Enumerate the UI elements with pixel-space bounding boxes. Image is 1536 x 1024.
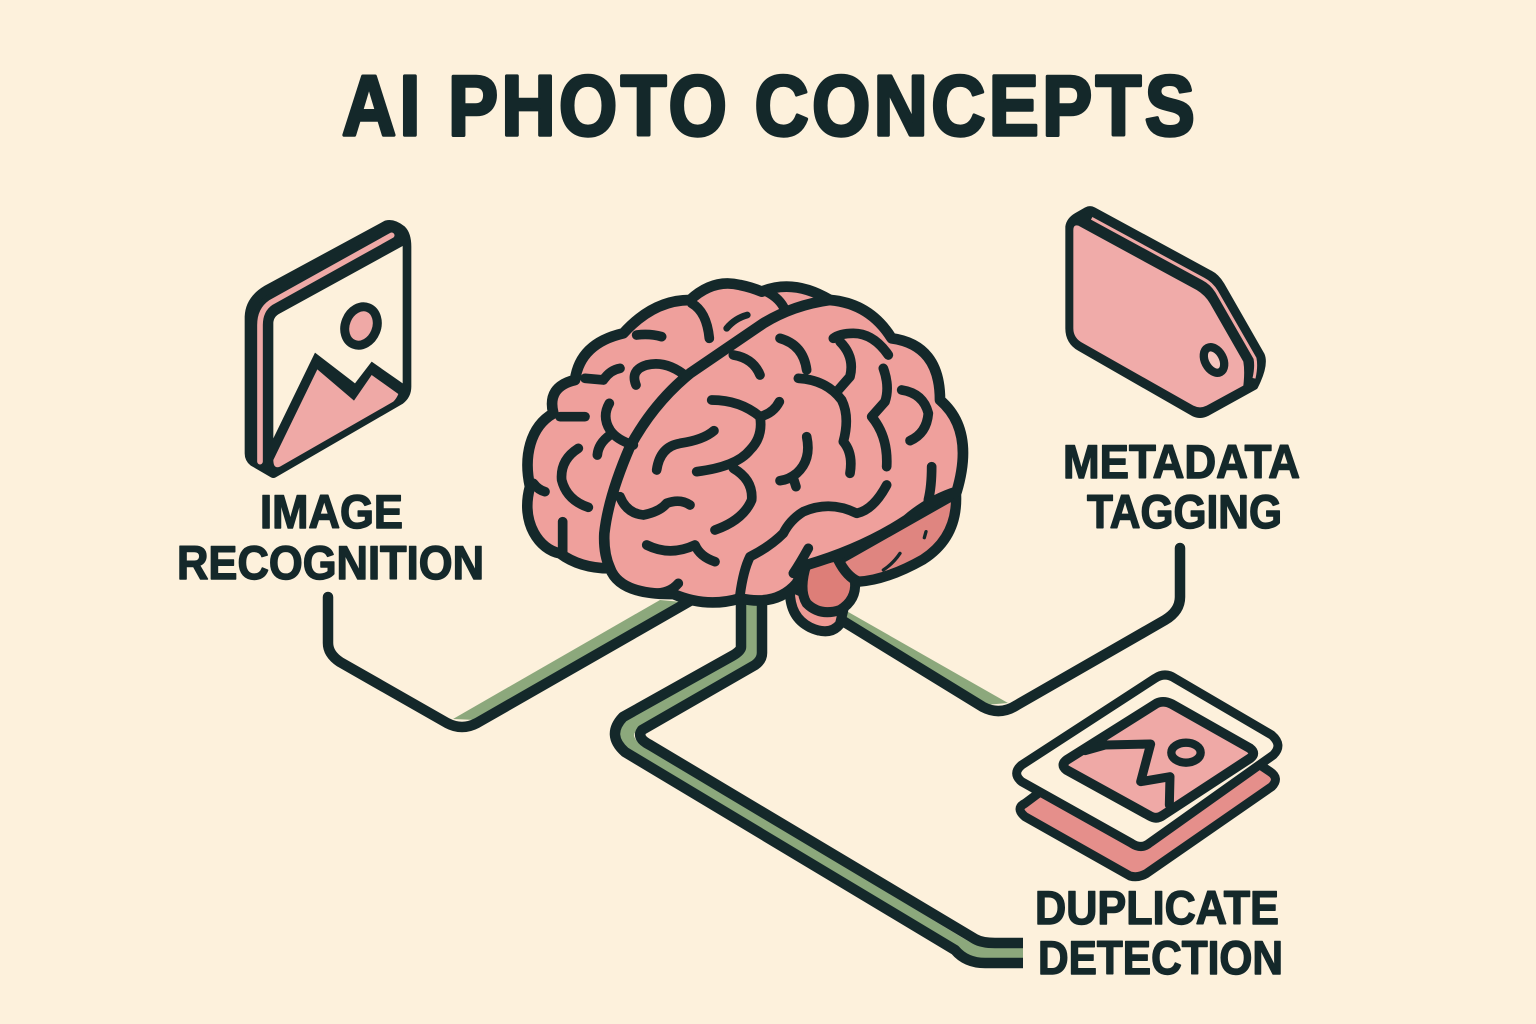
brainstem [790,557,855,631]
tag body [1068,209,1263,415]
label: metadata tagging: TAGGING [1087,485,1282,538]
picture [1063,702,1253,818]
tag face [1073,225,1244,407]
connector: image recognition to brain [328,597,690,727]
label: metadata tagging [1063,435,1300,538]
icon: duplicate photos [1017,675,1278,877]
sun [1171,743,1201,763]
picture window [273,246,403,438]
tag hole [1200,344,1228,376]
lower photo [1020,700,1275,877]
cerebellum [838,493,956,582]
connector: metadata tagging to brain [836,548,1180,711]
icon: brain [527,283,963,631]
label: image recognition: IMAGE [260,485,403,538]
mountain line [1085,744,1170,805]
label: duplicate detection: DUPLICATE [1035,881,1279,934]
label: duplicate detection: DETECTION [1038,931,1283,984]
icon: price tag [1068,209,1263,415]
icon: image frame [249,225,407,473]
label: image recognition [177,485,484,589]
frame body [249,225,407,473]
title: AI PHOTO CONCEPTS [342,59,1198,153]
tag edge [1092,218,1256,378]
upper photo [1017,675,1278,847]
label: metadata tagging: METADATA [1063,435,1300,488]
sun [339,302,383,350]
connector: duplicate detection to brain [615,600,1023,963]
pink edge [260,235,392,462]
label: image recognition: RECOGNITION [177,536,484,589]
label: duplicate detection [1035,881,1283,984]
mountain [273,369,398,467]
sulci [533,292,932,595]
brain body [527,283,963,602]
hemisphere divider [604,300,830,568]
